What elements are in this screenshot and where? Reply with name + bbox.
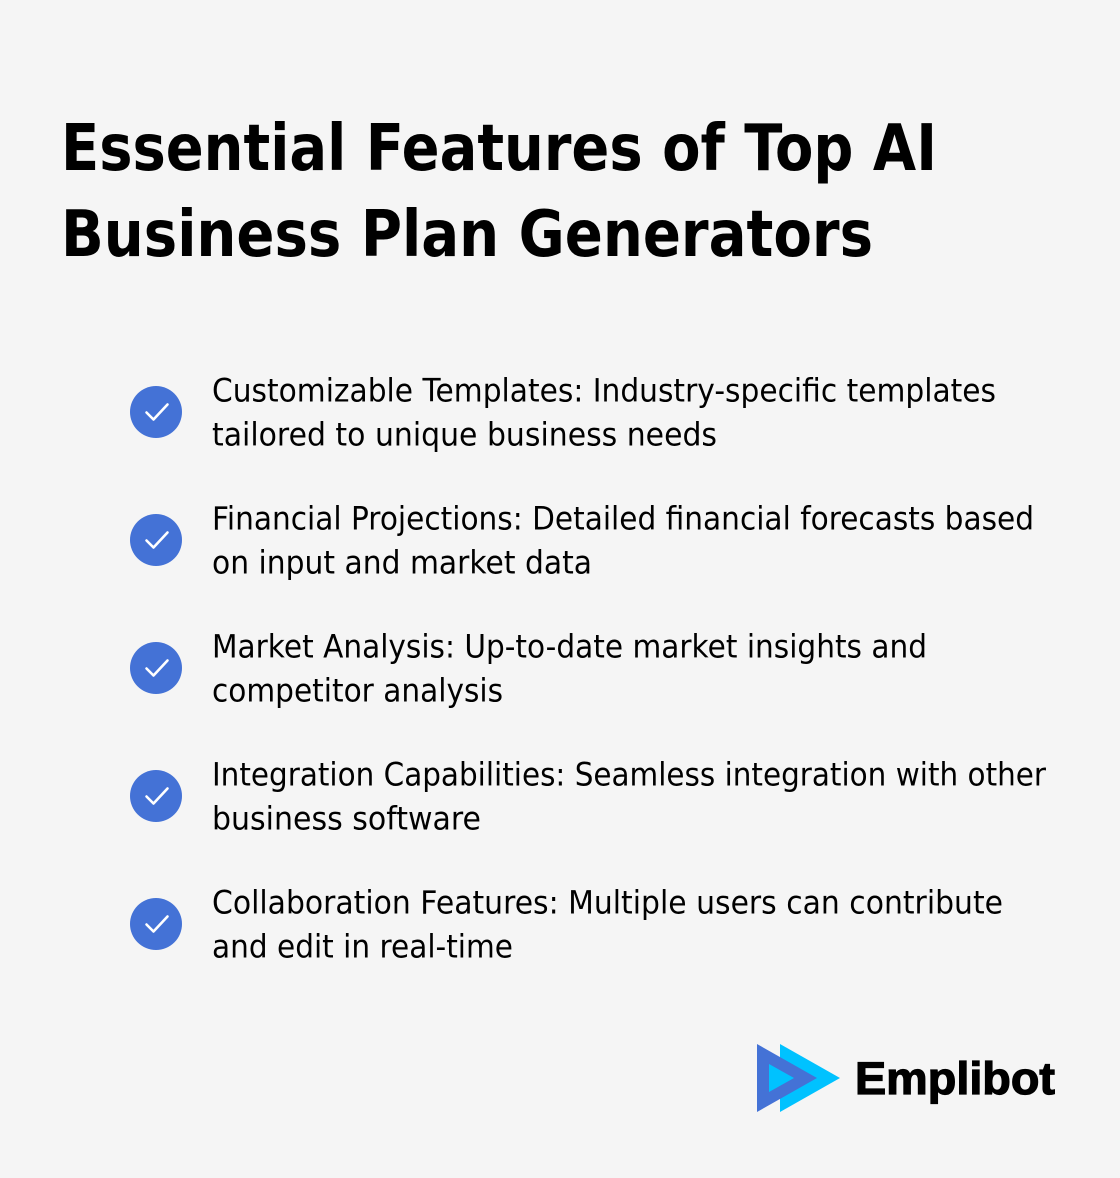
icon: check circle <box>130 514 182 566</box>
wordmark: Emplibot <box>855 1053 1055 1104</box>
item: financial projections <box>130 500 1034 582</box>
text: financial projections: Financial Projections: Detailed financial forecasts based <box>212 500 1034 538</box>
item: customizable templates <box>130 372 996 454</box>
text: customizable templates: tailored to unique business needs <box>212 416 717 454</box>
icon: check circle <box>130 898 182 950</box>
item: market analysis <box>130 628 927 710</box>
text: financial projections: on input and market data <box>212 544 592 582</box>
text: market analysis <box>212 628 927 710</box>
text: collaboration features: Collaboration Features: Multiple users can contribute <box>212 884 1003 922</box>
text: collaboration features: and edit in real-time <box>212 928 513 966</box>
item: collaboration features <box>130 884 1003 966</box>
text: market analysis: competitor analysis <box>212 672 503 710</box>
text: integration capabilities: business software <box>212 800 481 838</box>
text: collaboration features <box>212 884 1003 966</box>
feature list <box>130 372 1047 966</box>
text: integration capabilities: Integration Capabilities: Seamless integration with other <box>212 756 1047 794</box>
title: Business Plan Generators <box>61 198 873 272</box>
text: customizable templates: Customizable Templates: Industry-specific templates <box>212 372 996 410</box>
icon: check circle <box>130 642 182 694</box>
icon: check circle <box>130 770 182 822</box>
icon: play triangles <box>757 1044 840 1112</box>
text: financial projections <box>212 500 1034 582</box>
text: market analysis: Market Analysis: Up-to-date market insights and <box>212 628 927 666</box>
icon: check circle <box>130 386 182 438</box>
text: integration capabilities <box>212 756 1047 838</box>
item: integration capabilities <box>130 756 1047 838</box>
title: Essential Features of Top AI <box>61 112 937 186</box>
logo: Emplibot <box>757 1044 1055 1112</box>
title <box>61 112 937 272</box>
text: customizable templates <box>212 372 996 454</box>
